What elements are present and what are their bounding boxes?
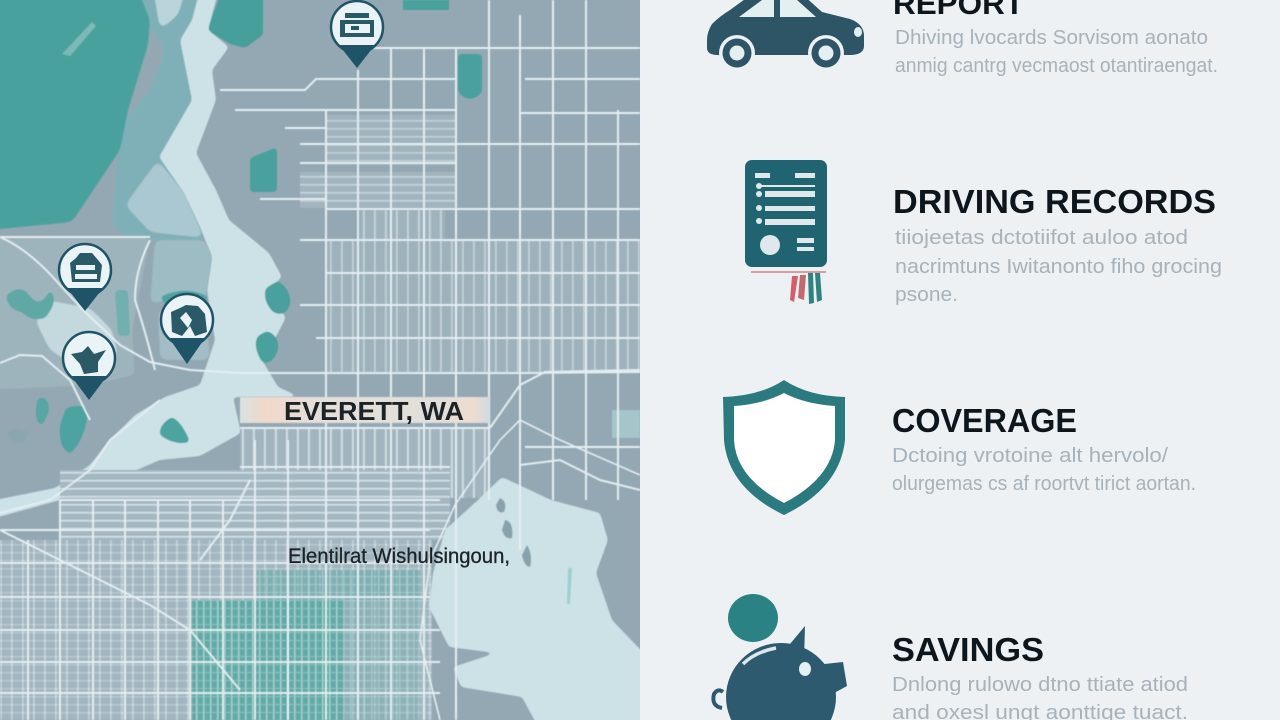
label: Everett Washington: Elentilrat Wishulsingoun,: [288, 545, 510, 568]
icon: document: [745, 160, 827, 304]
description: driving records: psone.: [895, 284, 958, 306]
row: savings: [713, 594, 1188, 720]
map: main streets: [0, 0, 640, 720]
pin: center: [161, 294, 213, 364]
heading: coverage: COVERAGE: [892, 402, 1077, 439]
icon: car: [707, 0, 864, 71]
description: driving records: tiiojeetas dctotiifot auloo atod: [895, 227, 1188, 249]
row: driving records: [745, 160, 1222, 306]
map: teal forest: [0, 0, 482, 240]
row: coverage: [723, 380, 1196, 515]
map: lake: [429, 477, 660, 720]
heading: savings: SAVINGS: [892, 631, 1044, 668]
pin: top: [331, 1, 383, 68]
description: savings: [892, 674, 1188, 720]
description: savings: Dnlong rulowo dtno ttiate atiod: [892, 674, 1188, 696]
map: lake islands: [496, 410, 640, 604]
label band: Everett, WA: [240, 396, 490, 426]
map: eastern dense street fill: [0, 115, 640, 720]
description: coverage: [892, 445, 1196, 495]
icon: piggy bank: [713, 594, 847, 720]
row: report: [707, 0, 1218, 77]
map: river: [0, 0, 300, 522]
right panel background: [640, 0, 1280, 720]
panel: map of Everett: [0, 0, 660, 720]
description: driving records: [895, 227, 1222, 306]
description: report: anmig cantrg vecmaost otantiraengat.: [895, 55, 1218, 77]
pin: southwest: [63, 332, 115, 400]
description: driving records: nacrimtuns Iwitanonto fiho grocing: [895, 256, 1222, 278]
map: river islands: [160, 281, 290, 443]
description: report: Dhiving lvocards Sorvisom aonato: [895, 27, 1208, 49]
heading: driving records: DRIVING RECORDS: [893, 183, 1216, 220]
description: coverage: Dctoing vrotoine alt hervolo/: [892, 445, 1168, 467]
description: coverage: olurgemas cs af roortvt tirict aortan.: [892, 473, 1196, 495]
label band: Everett, WA: EVERETT, WA: [284, 396, 464, 426]
pin: northwest: [59, 244, 111, 311]
map: western wetlands: [0, 237, 212, 495]
description: report: [895, 27, 1218, 77]
icon: shield: [723, 380, 845, 515]
